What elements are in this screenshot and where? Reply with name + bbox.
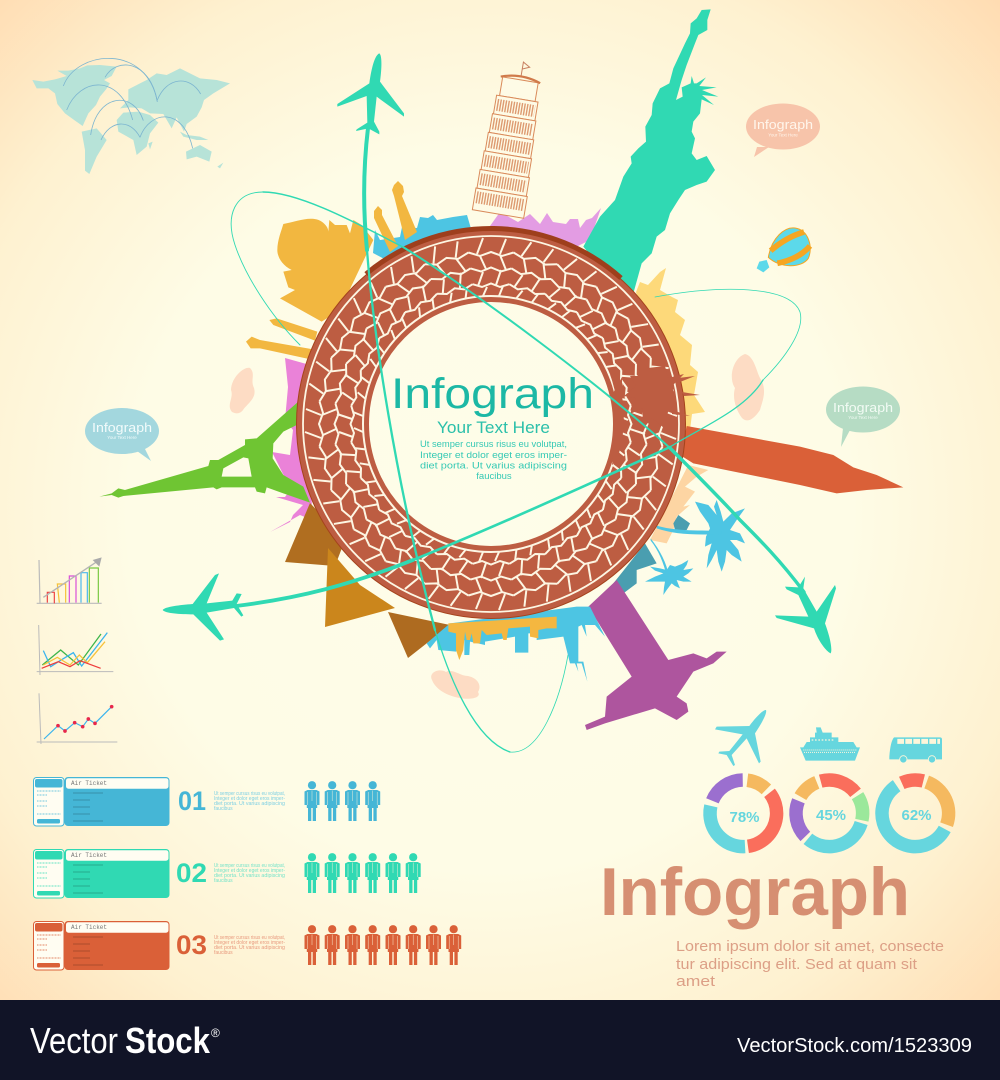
icon: bus [889, 737, 942, 763]
speech bubble: peach [746, 104, 820, 157]
footer logo: ® [211, 1026, 220, 1040]
donut chart: 62% [870, 768, 960, 858]
ticket row 03: Ut semper cursus risus eu volutpat, [214, 935, 285, 941]
landmark: Statue of Liberty [583, 9, 718, 293]
speech bubble: peach: Infograph [753, 117, 813, 132]
icon: airplane [715, 710, 766, 766]
speech bubble: peach: Your Text Here [768, 132, 798, 138]
plane: top [337, 53, 404, 134]
ticket row 01: 01 [178, 786, 206, 816]
plane: right [775, 577, 836, 653]
footer logo: Vector [30, 1020, 118, 1061]
speech bubble: green: Your Text Here [848, 415, 878, 420]
centre paragraph: diet porta. Ut varius adipiscing [420, 460, 567, 472]
ticket row 02: diet porta. Ut varius adipiscing [214, 873, 285, 879]
footer logo [30, 1020, 220, 1061]
donut chart: 45%: 45% [816, 807, 846, 824]
paint splash on ring [612, 360, 700, 465]
landmark: pyramids [285, 503, 450, 658]
flight path: top plane [364, 128, 568, 752]
landmark: Christ the Redeemer [585, 580, 727, 730]
footer url: VectorStock.com/1523309 [737, 1035, 972, 1057]
skyline: peach right [650, 465, 708, 543]
centre paragraph [420, 439, 567, 482]
donut chart: 45% [782, 766, 876, 860]
plane: left [163, 573, 243, 641]
chart: sketch bars [37, 557, 102, 603]
minarets: top [374, 181, 417, 252]
donut chart: 78% [697, 767, 790, 860]
flight path: right plane [231, 192, 804, 592]
footer logo: Stock [125, 1020, 211, 1061]
speech bubble: blue [85, 408, 159, 461]
speech bubble: green: Infograph [833, 400, 893, 415]
centre paragraph: faucibus [476, 471, 512, 482]
speech bubble: blue: Infograph [92, 420, 152, 435]
landmark: Big Ben [680, 426, 903, 493]
skyline: blue top [373, 215, 472, 262]
ticket row 02 [34, 849, 421, 898]
skyline: pink top [490, 208, 601, 250]
bottom paragraph: amet [676, 974, 715, 990]
bottom paragraph [676, 939, 944, 990]
ticket row 03: Integer et dolor eget eros imper- [214, 940, 285, 946]
skyline: dark teal right [613, 515, 690, 593]
centre subheading: Your Text Here [437, 419, 550, 437]
ticket row 03 [34, 921, 461, 970]
donut chart: 62%: 62% [901, 807, 932, 824]
centre heading: Infograph [391, 370, 594, 418]
chart: sketch lines [37, 625, 113, 675]
ticket row 01: faucibus [214, 806, 233, 812]
ticket row 01: Ut semper cursus risus eu volutpat, [214, 791, 285, 797]
landmark: domed palace [246, 217, 373, 359]
ticket row 03: 03 [176, 930, 207, 960]
donut chart: 78%: 78% [729, 809, 760, 826]
icon: cruise ship [800, 727, 860, 761]
ticket row 03: faucibus [214, 950, 233, 956]
chart: sketch points [37, 693, 117, 744]
ticket row 02: Ut semper cursus risus eu volutpat, [214, 863, 285, 869]
bottom paragraph: tur adipiscing elit. Sed at quam sit [676, 957, 917, 973]
flight path: left plane [236, 289, 801, 606]
bottom paragraph: Lorem ipsum dolor sit amet, consecte [676, 939, 944, 955]
ticket row 02: faucibus [214, 878, 233, 884]
bottom title: Infograph [600, 854, 910, 930]
ticket row 02: 02 [176, 858, 207, 888]
tyre-tread ring [297, 229, 685, 618]
speech bubble: green [826, 386, 900, 447]
palm trees [645, 500, 745, 595]
clouds [230, 354, 764, 699]
ticket row 01: Air Ticket [71, 780, 107, 787]
skyline: pink left [270, 358, 312, 532]
ticket row 02: Integer et dolor eget eros imper- [214, 868, 285, 874]
icon: hot air balloon [757, 228, 810, 272]
landmark: Leaning Tower of Pisa [472, 58, 549, 218]
footer bar [0, 1000, 1000, 1080]
skyline: bottom [427, 607, 605, 682]
centre paragraph: Ut semper cursus risus eu volutpat, [420, 439, 567, 450]
world map with flight arcs [32, 58, 230, 174]
ticket row 03: Air Ticket [71, 924, 107, 931]
ticket row 01: Integer et dolor eget eros imper- [214, 796, 285, 802]
speech bubble: blue: Your Text Here [107, 435, 137, 440]
ticket row 02: Air Ticket [71, 852, 107, 859]
ticket row 03: diet porta. Ut varius adipiscing [214, 945, 285, 951]
ticket row 01: diet porta. Ut varius adipiscing [214, 801, 285, 807]
centre paragraph: Integer et dolor eget eros imper- [420, 450, 567, 461]
landmark: Eiffel Tower [99, 402, 310, 503]
ticket row 01 [34, 777, 380, 826]
skyline: yellow right [636, 268, 705, 430]
